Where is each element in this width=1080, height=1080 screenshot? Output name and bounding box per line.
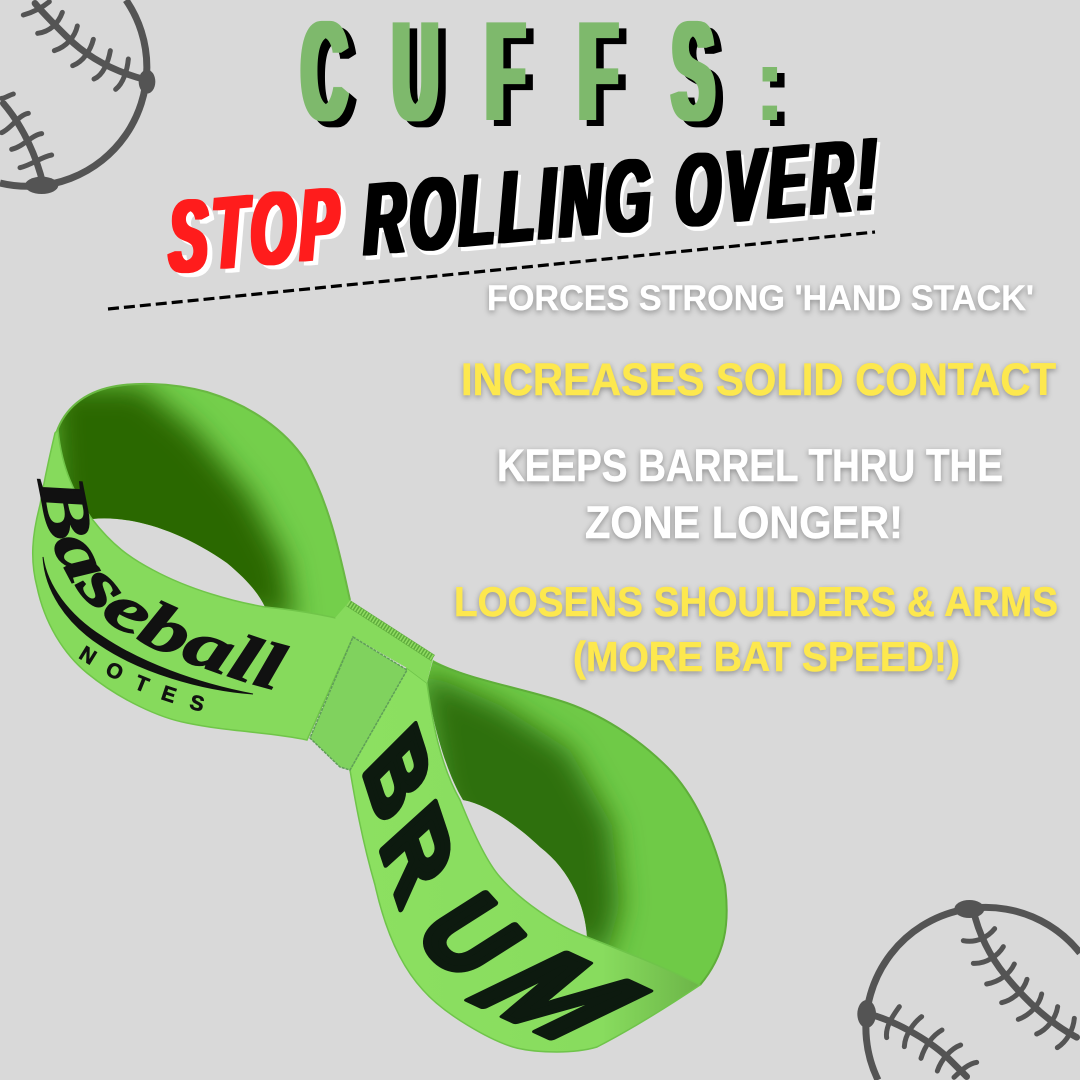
benefit: forces strong hand stack: FORCES STRONG 'HAND STACK': [487, 279, 1034, 318]
zipper seam: [348, 603, 433, 658]
title: CUFFS: :: [770, 33, 785, 149]
band text: BRUM: R: [363, 782, 470, 926]
band logo: baseball notes: Baseball: [36, 478, 290, 690]
inner rims: [55, 384, 350, 600]
benefit: keeps barrel thru the zone longer: KEEPS BARREL THRU THE: [497, 440, 1003, 491]
front band lower: [350, 668, 700, 1052]
title: CUFFS: CUFFS: [309, 0, 721, 157]
benefit: loosens shoulders and arms: (MORE BAT SPEED!): [573, 633, 960, 680]
velcro patch: [310, 637, 407, 770]
icon: baseball bottom right: [857, 900, 1080, 1080]
title: CUFFS: :: [762, 27, 777, 143]
headline: stop rolling over: STOP ROLLING OVER!: [168, 116, 882, 295]
photo: green hitting cuff band: [32, 382, 728, 1057]
benefit: keeps barrel thru the zone longer: [497, 440, 1003, 548]
lower loop inner surface: [427, 660, 726, 984]
front band upper: [33, 430, 362, 740]
upper loop inner surface: [58, 384, 350, 618]
band text: BRUM: [347, 704, 688, 1057]
band text: BRUM: M: [430, 934, 688, 1057]
icon: baseball top left: [0, 0, 155, 194]
benefit: keeps barrel thru the zone longer: ZONE LONGER!: [585, 497, 903, 548]
band logo: baseball notes: NOTES: [78, 645, 204, 711]
band text: BRUM: B: [347, 704, 447, 845]
headline: stop rolling over: STOP ROLLING OVER!: [173, 120, 885, 299]
band text: BRUM: U: [391, 875, 549, 997]
fold above patch: [335, 603, 433, 683]
dashed divider: [108, 232, 875, 309]
benefit: loosens shoulders and arms: [454, 578, 1058, 680]
